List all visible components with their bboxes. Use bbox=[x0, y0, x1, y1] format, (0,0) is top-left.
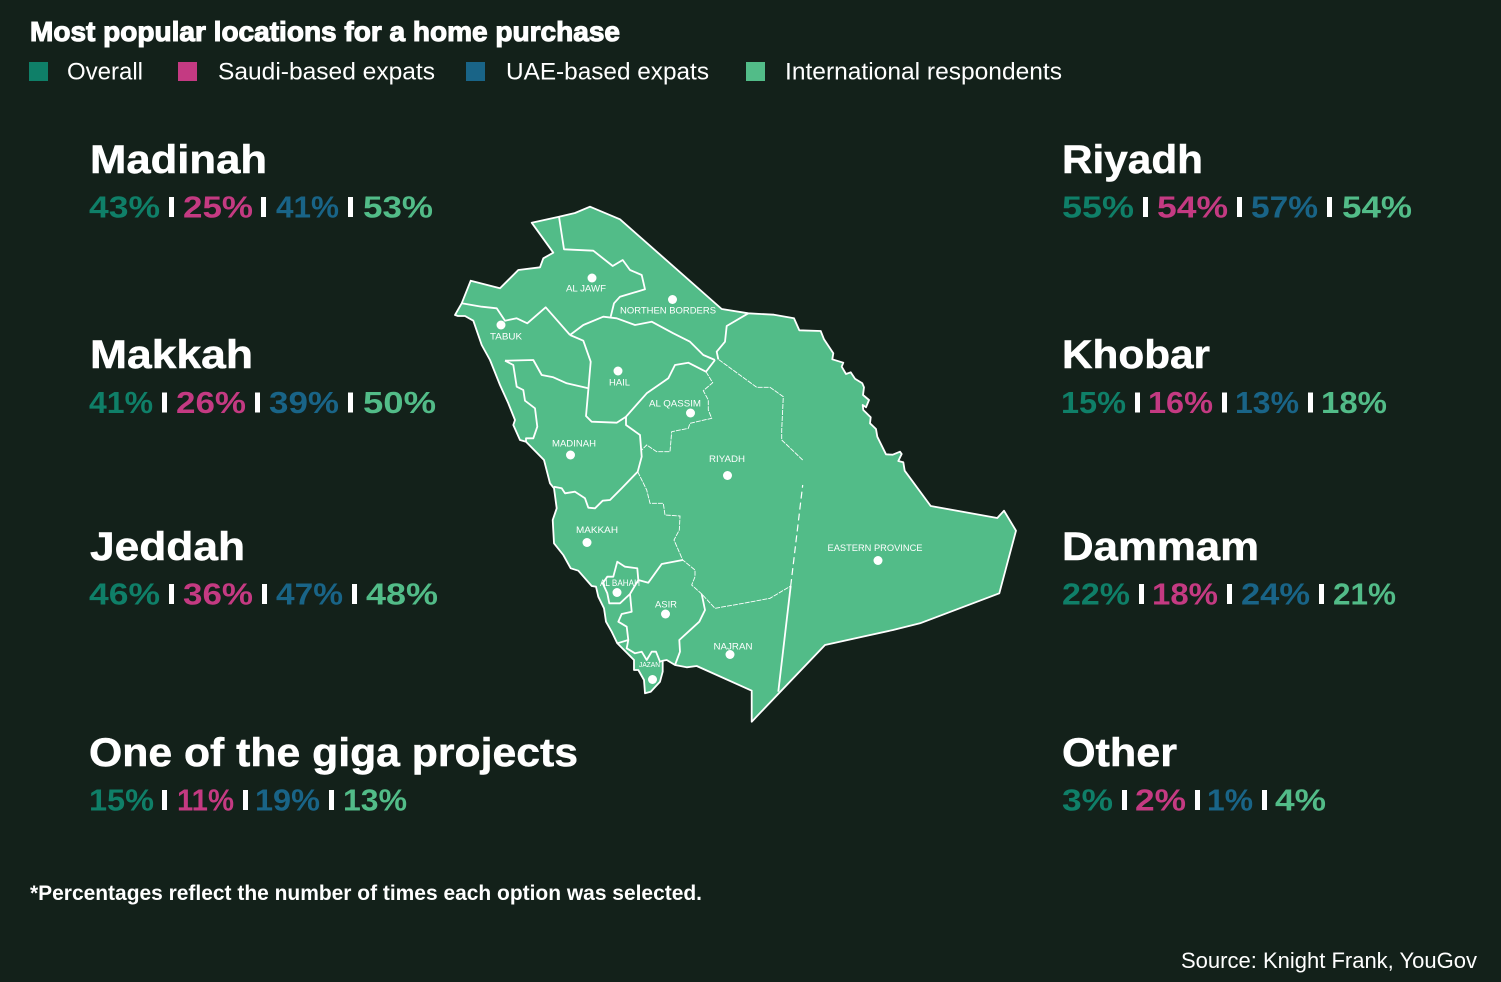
panel: Other bbox=[1062, 731, 1326, 818]
city: Eastern Province: EASTERN PROVINCE bbox=[828, 543, 922, 554]
city: Madinah bbox=[552, 438, 596, 460]
panel: Dammam: 24% bbox=[1241, 576, 1310, 612]
panel: Jeddah: 46% bbox=[89, 576, 160, 612]
city: Asir: ASIR bbox=[655, 600, 677, 610]
legend bbox=[29, 58, 1062, 86]
city: Eastern Province bbox=[828, 543, 922, 565]
legend: overall bbox=[29, 58, 143, 86]
panel: Jeddah bbox=[89, 525, 438, 612]
city: Al Bahah bbox=[600, 578, 640, 597]
panel: Madinah: Madinah bbox=[90, 138, 267, 182]
city: Hail: HAIL bbox=[609, 378, 630, 388]
city: Asir bbox=[655, 600, 677, 618]
panel: Other: 3% bbox=[1062, 782, 1113, 818]
panel: Makkah: 41% bbox=[89, 385, 153, 420]
legend: overall: Overall bbox=[67, 58, 143, 86]
city: Riyadh bbox=[709, 454, 745, 480]
panel: Makkah: 26% bbox=[176, 385, 246, 420]
city: Jazan: JAZAN bbox=[639, 660, 660, 669]
title: Most popular locations for a home purchase bbox=[30, 16, 620, 47]
panel: Makkah bbox=[89, 333, 436, 420]
panel: Dammam: Dammam bbox=[1062, 525, 1259, 569]
legend: UAE-based expats: UAE-based expats bbox=[506, 58, 709, 86]
panel: One of the giga projects: 19% bbox=[255, 782, 320, 818]
panel: Madinah: 25% bbox=[183, 190, 253, 224]
panel: Dammam: 18% bbox=[1152, 576, 1218, 612]
panel: Dammam bbox=[1062, 525, 1396, 612]
panel: Khobar: Khobar bbox=[1062, 333, 1210, 377]
panel: Jeddah: 36% bbox=[183, 576, 253, 612]
city: Al Qassim bbox=[649, 398, 701, 418]
city: Jazan bbox=[639, 660, 660, 684]
panel: One of the giga projects: 11% bbox=[177, 782, 234, 818]
panel: One of the giga projects bbox=[89, 731, 578, 818]
panel: Makkah: 39% bbox=[269, 385, 339, 420]
city: Northen Borders bbox=[620, 295, 716, 317]
panel: One of the giga projects: One of the giga projects bbox=[89, 731, 578, 775]
city: Najran: NAJRAN bbox=[714, 642, 753, 652]
panel: Dammam: 21% bbox=[1333, 576, 1396, 612]
panel: Madinah: 41% bbox=[276, 190, 339, 224]
city: Hail bbox=[609, 366, 630, 388]
panel: Makkah: 50% bbox=[363, 385, 436, 420]
panel: One of the giga projects: 13% bbox=[343, 782, 407, 818]
panel: Riyadh: 55% bbox=[1062, 190, 1134, 224]
panel: Riyadh: Riyadh bbox=[1062, 138, 1203, 182]
legend: Saudi-based expats: Saudi-based expats bbox=[218, 58, 435, 86]
panel: Madinah: 53% bbox=[363, 190, 433, 224]
source: Source: Knight Frank, YouGov bbox=[1181, 948, 1477, 973]
city: Tabuk bbox=[490, 320, 523, 342]
panel: Other: 1% bbox=[1207, 782, 1253, 818]
city: Makkah bbox=[576, 525, 618, 547]
city: Al Jawf: AL JAWF bbox=[566, 284, 606, 295]
panel: Other: Other bbox=[1062, 731, 1177, 775]
panel: Jeddah: Jeddah bbox=[90, 525, 245, 569]
city: Al Bahah: AL BAHAH bbox=[600, 578, 640, 589]
city: Tabuk: TABUK bbox=[490, 332, 523, 342]
panel: Riyadh bbox=[1062, 138, 1412, 224]
footnote: *Percentages reflect the number of times each option was selected. bbox=[30, 882, 702, 905]
city: Makkah: MAKKAH bbox=[576, 525, 618, 536]
legend: international respondents: International respondents bbox=[785, 58, 1062, 86]
city: Najran bbox=[714, 642, 753, 659]
panel: Madinah bbox=[89, 138, 433, 224]
panel: Dammam: 22% bbox=[1062, 576, 1130, 612]
map outline bbox=[455, 207, 1016, 722]
panel: Other: 2% bbox=[1135, 782, 1186, 818]
city: Northen Borders: NORTHEN BORDERS bbox=[620, 306, 716, 317]
panel: Jeddah: 48% bbox=[366, 576, 438, 612]
city: Al Qassim: AL QASSIM bbox=[649, 398, 701, 410]
panel: Riyadh: 54% bbox=[1157, 190, 1228, 224]
panel: Riyadh: 57% bbox=[1251, 190, 1318, 224]
panel: Khobar: 15% bbox=[1061, 385, 1126, 420]
panel: Riyadh: 54% bbox=[1342, 190, 1412, 224]
panel: Jeddah: 47% bbox=[276, 576, 343, 612]
panel: Other: 4% bbox=[1275, 782, 1326, 818]
panel: Makkah: Makkah bbox=[90, 333, 253, 377]
panel: Khobar: 13% bbox=[1235, 385, 1299, 420]
panel: Madinah: 43% bbox=[89, 190, 160, 224]
map of Saudi Arabia bbox=[455, 207, 1016, 722]
city: Madinah: MADINAH bbox=[552, 438, 596, 450]
panel: Khobar bbox=[1061, 333, 1387, 420]
city: Riyadh: RIYADH bbox=[709, 454, 745, 465]
region borders bbox=[462, 217, 803, 692]
panel: Khobar: 18% bbox=[1321, 385, 1387, 420]
city: Al Jawf bbox=[566, 274, 606, 295]
panel: Khobar: 16% bbox=[1148, 385, 1213, 420]
panel: One of the giga projects: 15% bbox=[89, 782, 154, 818]
